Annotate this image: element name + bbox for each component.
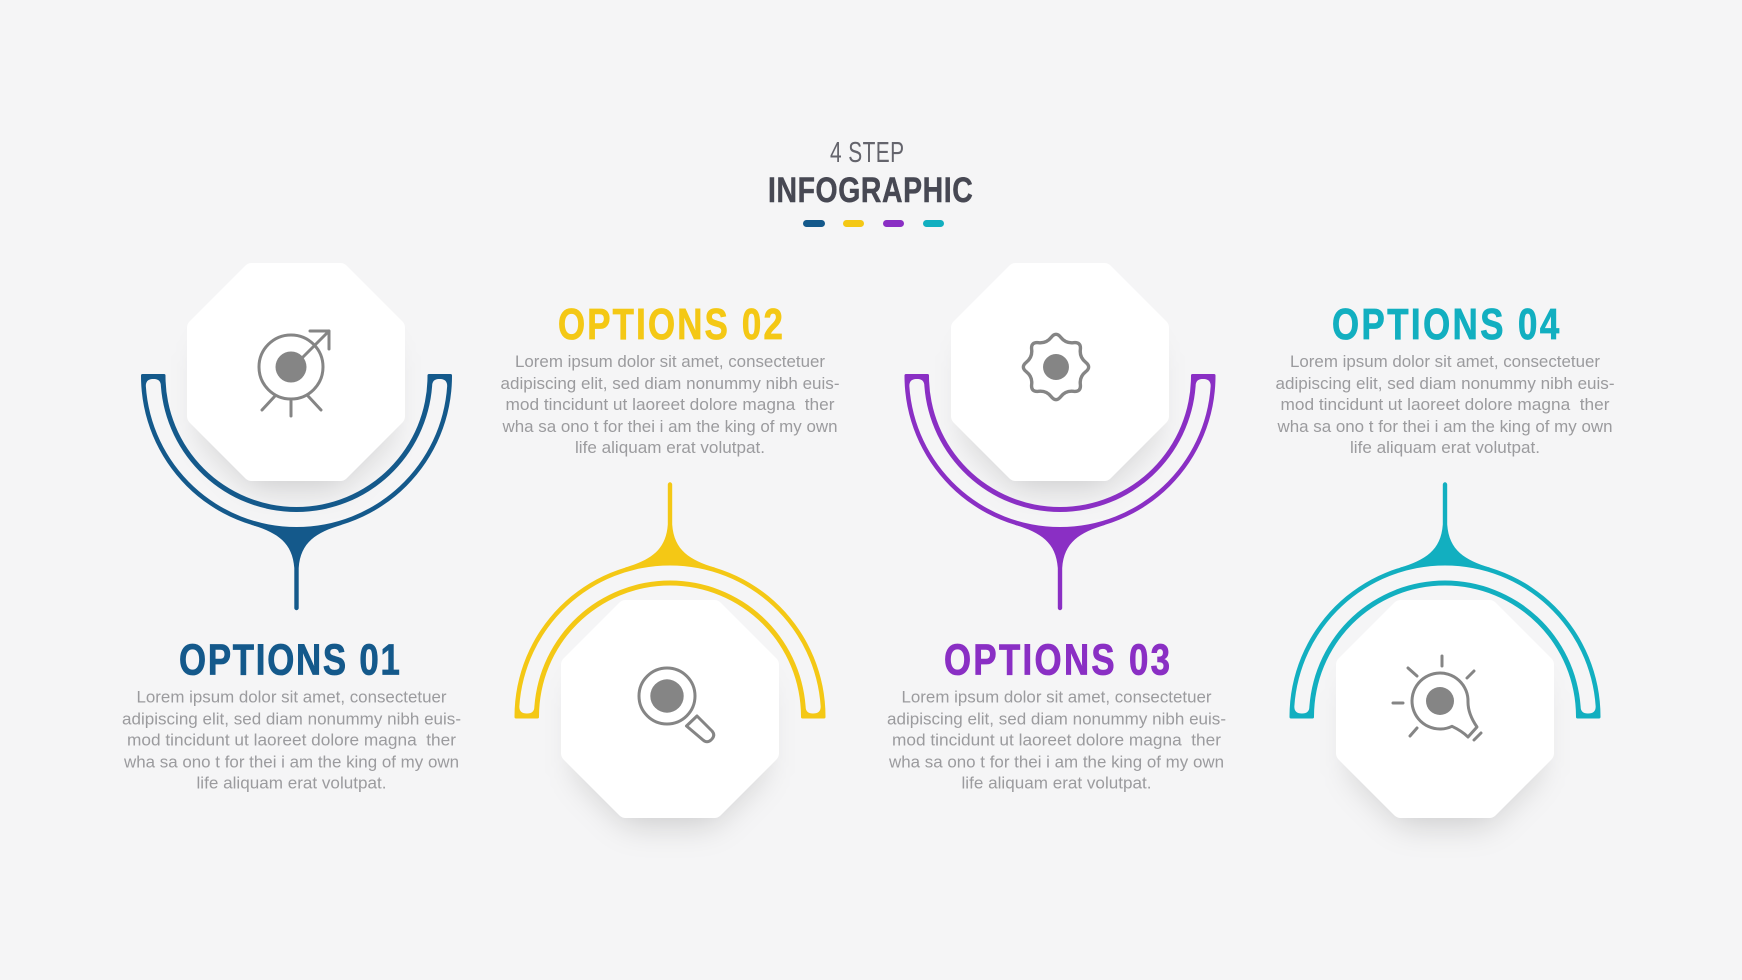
icon: target with arrow xyxy=(259,331,329,416)
text block: options 04: adipiscing elit, sed diam nonummy nibh euis- xyxy=(1276,375,1614,393)
arc connector xyxy=(1290,482,1600,718)
text block: options 03: mod tincidunt ut laoreet dolore magna ther xyxy=(892,732,1222,750)
panel: options 02 xyxy=(500,300,840,825)
heading: options 02: OPTIONS 02 xyxy=(558,300,783,349)
icon: magnifier xyxy=(639,668,714,742)
text block: options 04: Lorem ipsum dolor sit amet, consectetuer xyxy=(1290,353,1601,371)
octagon card xyxy=(196,272,396,472)
octagon shadow xyxy=(204,304,388,488)
icon: gear xyxy=(1023,334,1089,400)
text block: options 03: Lorem ipsum dolor sit amet, consectetuer xyxy=(902,688,1212,706)
panel: options 01 xyxy=(122,272,461,792)
text block: options 02: adipiscing elit, sed diam nonummy nibh euis- xyxy=(500,375,840,393)
text block: options 04 xyxy=(1276,353,1614,457)
text block: options 01 xyxy=(122,688,461,792)
text block: options 04: mod tincidunt ut laoreet dolore magna ther xyxy=(1280,396,1610,414)
text block: options 02: Lorem ipsum dolor sit amet, consectetuer xyxy=(515,353,826,371)
text block: options 02: wha sa ono t for thei i am the king of my own xyxy=(501,418,838,436)
panel: options 03 xyxy=(887,272,1226,792)
octagon shadow xyxy=(578,641,762,825)
panel: options 04 xyxy=(1276,300,1614,825)
octagon shadow xyxy=(968,304,1152,488)
text block: options 03 xyxy=(887,688,1226,792)
text block: options 01: wha sa ono t for thei i am the king of my own xyxy=(123,754,459,772)
text block: options 03: life aliquam erat volutpat. xyxy=(962,774,1152,792)
octagon card xyxy=(960,272,1160,472)
octagon card xyxy=(570,609,770,809)
text block: options 04: life aliquam erat volutpat. xyxy=(1350,439,1540,457)
text block: options 01: Lorem ipsum dolor sit amet, consectetuer xyxy=(136,688,447,706)
colour legend dashes xyxy=(803,220,944,227)
heading: options 03: OPTIONS 03 xyxy=(944,636,1170,684)
text block: options 03: adipiscing elit, sed diam nonummy nibh euis- xyxy=(887,710,1226,728)
text block: options 02: mod tincidunt ut laoreet dolore magna ther xyxy=(506,396,835,414)
arc connector xyxy=(904,374,1216,610)
octagon shadow xyxy=(1353,641,1537,825)
title: INFOGRAPHIC xyxy=(768,170,973,210)
arc connector xyxy=(141,374,452,610)
heading: options 01: OPTIONS 01 xyxy=(179,636,400,684)
text block: options 03: wha sa ono t for thei i am the king of my own xyxy=(888,754,1224,772)
text block: options 01: mod tincidunt ut laoreet dolore magna ther xyxy=(127,732,457,750)
title: 4 STEP xyxy=(830,137,904,169)
arc connector xyxy=(514,482,826,718)
text block: options 04: wha sa ono t for thei i am the king of my own xyxy=(1276,418,1612,436)
icon: light bulb xyxy=(1393,656,1481,740)
text block: options 02 xyxy=(500,353,840,457)
text block: options 01: adipiscing elit, sed diam nonummy nibh euis- xyxy=(122,710,461,728)
octagon card xyxy=(1345,609,1545,809)
text block: options 02: life aliquam erat volutpat. xyxy=(575,439,765,457)
heading: options 04: OPTIONS 04 xyxy=(1332,300,1559,349)
text block: options 01: life aliquam erat volutpat. xyxy=(196,774,386,792)
title xyxy=(768,137,973,210)
